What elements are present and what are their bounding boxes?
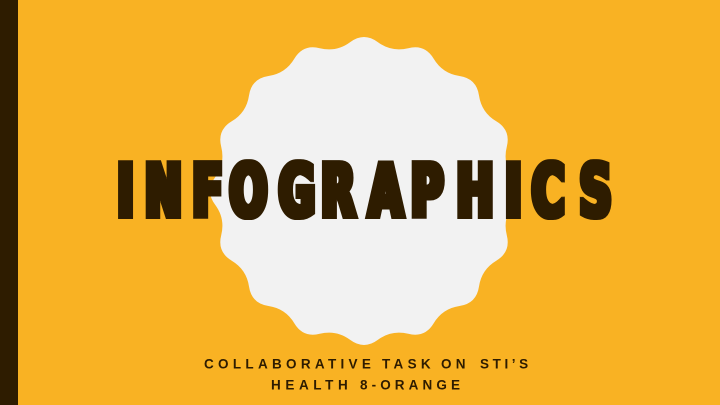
subtitle line 2: HEALTH — [271, 378, 361, 392]
title: INFOGRAPHICS — [117, 150, 611, 234]
subtitle line 2: 8-ORANGE — [360, 378, 464, 392]
left dark bar — [0, 0, 18, 405]
subtitle line 1: TASK — [382, 356, 443, 372]
subtitle line 1: STI’S — [480, 356, 532, 372]
wavy circle badge — [210, 37, 518, 345]
subtitle — [204, 356, 532, 392]
subtitle line 1: COLLABORATIVE — [204, 356, 383, 372]
subtitle line 1: ON — [441, 356, 478, 372]
